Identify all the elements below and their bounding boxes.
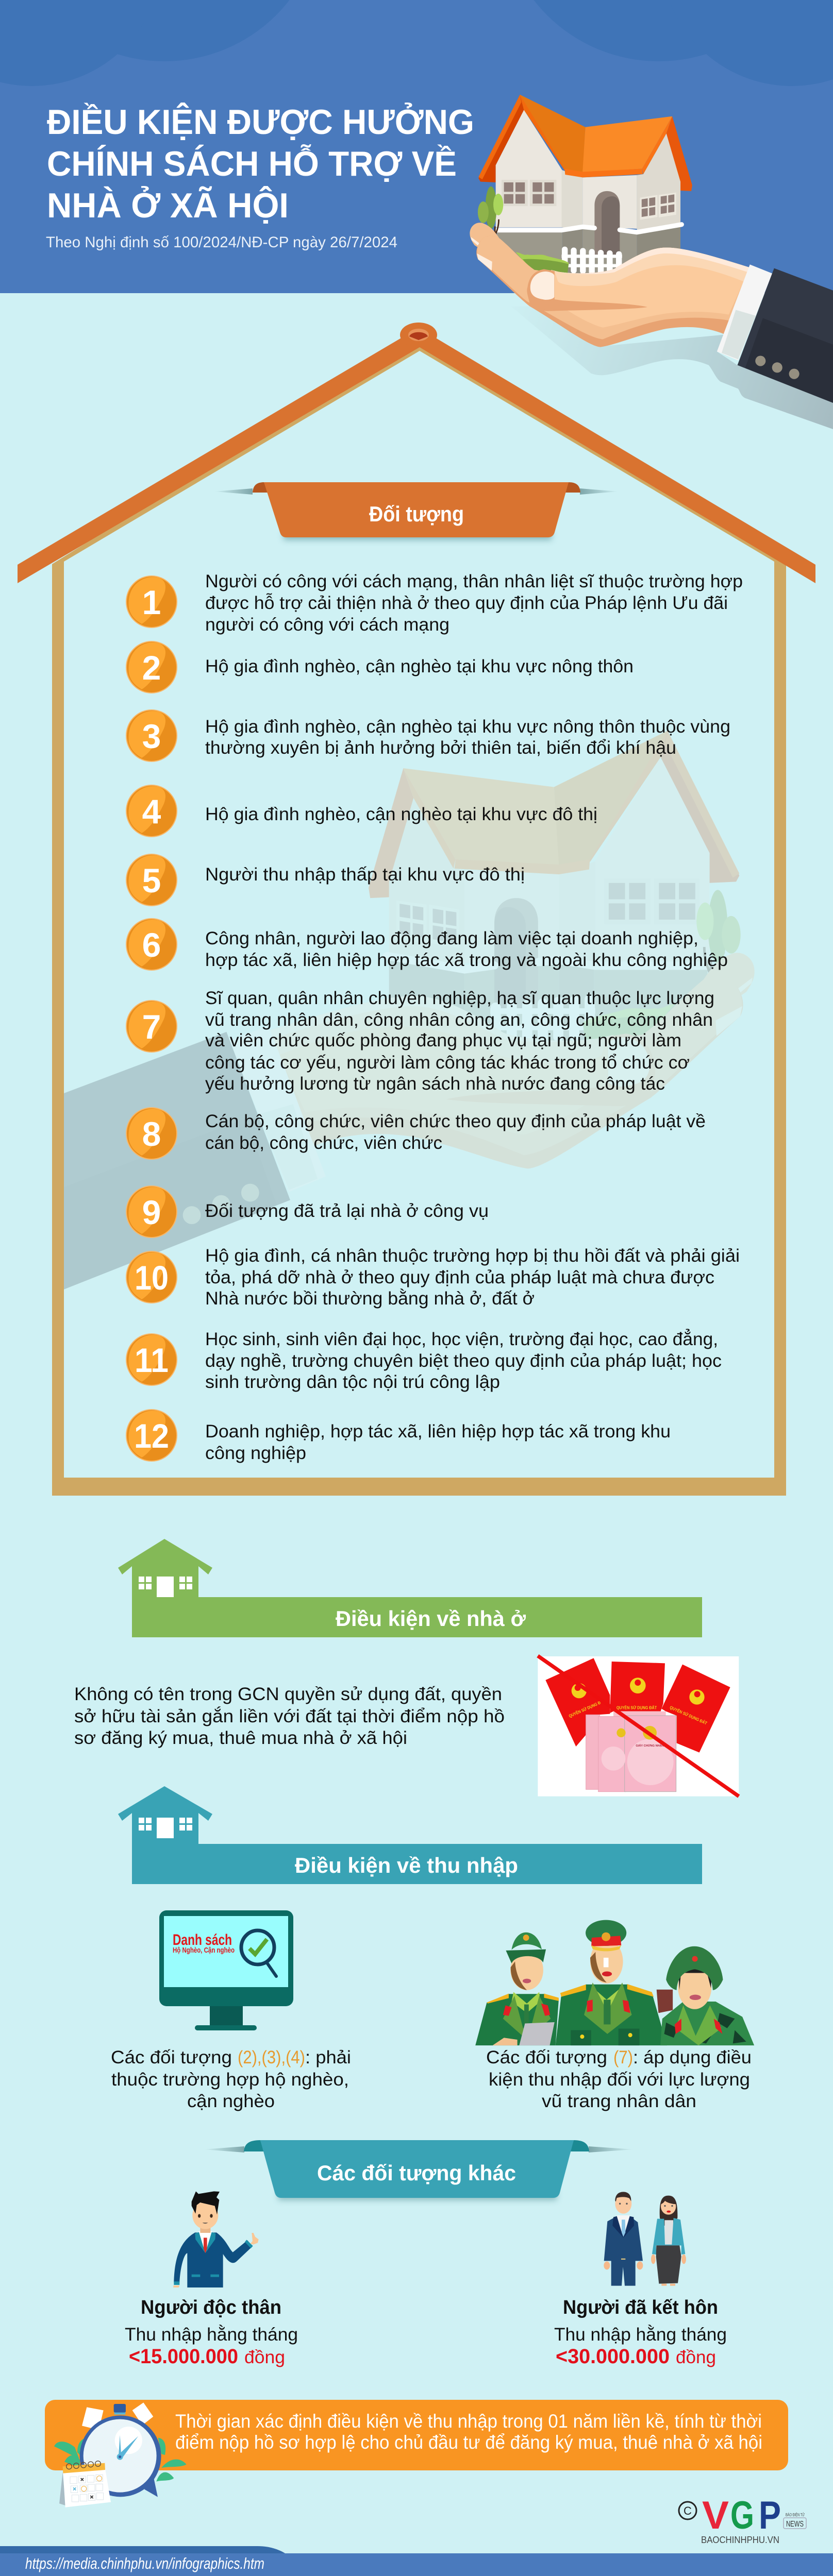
logo: VGP: C [684, 2504, 692, 2517]
item 8: Cán bộ, công chức, viên chức theo quy định của pháp luật về [205, 1111, 706, 1131]
section bar: income condition [118, 1786, 702, 1884]
income text: left: (2),(3),(4) [238, 2047, 305, 2067]
item 2: 2 [142, 649, 161, 687]
item 6: hợp tác xã, liên hiệp hợp tác xã trong và ngoài khu công nghiệp [205, 950, 728, 970]
item 2 [126, 641, 634, 693]
illustration: three soldiers [475, 1920, 754, 2045]
income text: right: : áp dụng điều [633, 2047, 752, 2067]
item 12: 12 [134, 1417, 169, 1455]
single person text: Người độc thân [141, 2297, 281, 2318]
footer bar [0, 2546, 833, 2576]
married couple text: đồng [676, 2347, 716, 2367]
title: NHÀ Ở XÃ HỘI [47, 185, 289, 225]
married couple text: Thu nhập hằng tháng [554, 2325, 727, 2345]
married couple text: <30.000.000 [556, 2345, 670, 2368]
image: crossed-out land certificates: QUYỀN SỬ DỤNG Đ [568, 1700, 602, 1719]
image: crossed-out land certificates: QUYỀN SỬ DỤNG ĐẤT [617, 1704, 657, 1710]
housing condition text: sơ đăng ký mua, thuê mua nhà ở xã hội [74, 1728, 407, 1748]
housing condition text: Không có tên trong GCN quyền sử dụng đất, quyền [74, 1684, 502, 1704]
image: crossed-out land certificates [538, 1656, 739, 1797]
title [47, 102, 474, 225]
item 3 [126, 709, 730, 762]
item 3: thường xuyên bị ảnh hưởng bởi thiên tai, biến đổi khí hậu [205, 738, 676, 758]
item 7: công tác cơ yếu, người làm công tác khác trong tổ chức cơ [205, 1053, 690, 1073]
item 10: 10 [135, 1259, 169, 1297]
ribbon heading: Các đối tượng khác: Các đối tượng khác [317, 2161, 516, 2185]
item 11: 11 [135, 1341, 169, 1379]
illustration: married couple [604, 2192, 686, 2286]
item 7: và viên chức quốc phòng đang phục vụ tại ngũ; người làm [205, 1030, 681, 1050]
section bar: housing condition [118, 1539, 702, 1637]
item 10: tỏa, phá dỡ nhà ở theo quy định của pháp luật mà chưa được [205, 1267, 714, 1287]
item 5: Người thu nhập thấp tại khu vực đô thị [205, 865, 525, 885]
housing condition text [74, 1684, 505, 1748]
item 1: được hỗ trợ cải thiện nhà ở theo quy định của Pháp lệnh Ưu đãi [205, 593, 728, 613]
income text: left: : phải [305, 2047, 351, 2067]
item 7: vũ trang nhân dân, công nhân công an, công chức, công nhân [205, 1010, 713, 1030]
item 4: Hộ gia đình nghèo, cận nghèo tại khu vực đô thị [205, 804, 597, 824]
married couple text [554, 2297, 727, 2368]
item 7: 7 [142, 1008, 161, 1046]
watermark: faded house in hand [30, 731, 755, 1303]
logo: VGP: BAOCHINHPHU.VN [701, 2535, 779, 2545]
icon: monitor with list: Hộ Nghèo, Cận nghèo [173, 1946, 235, 1955]
income text: left: cận nghèo [187, 2091, 275, 2111]
income text: left: Các đối tượng [111, 2047, 232, 2067]
income text: left: thuộc trường hợp hộ nghèo, [111, 2070, 349, 2090]
item 1: Người có công với cách mạng, thân nhân liệt sĩ thuộc trường hợp [205, 571, 743, 591]
item 8 [126, 1107, 706, 1160]
item 8: 8 [142, 1115, 161, 1153]
single person text [125, 2297, 298, 2368]
item 12: công nghiệp [205, 1443, 306, 1463]
logo: VGP: V [702, 2494, 729, 2537]
logo: VGP [679, 2494, 806, 2545]
item 3: Hộ gia đình nghèo, cận nghèo tại khu vực nông thôn thuộc vùng [205, 717, 730, 737]
header banner [0, 0, 833, 293]
item 11: sinh trường dân tộc nội trú công lập [205, 1372, 500, 1392]
item 7 [126, 988, 714, 1094]
subtitle: Theo Nghị định số 100/2024/NĐ-CP ngày 26/7/2024 [46, 234, 397, 251]
item 6 [126, 918, 728, 971]
item 11: Học sinh, sinh viên đại học, học viện, trường đại học, cao đẳng, [205, 1329, 718, 1349]
callout: time period note [45, 2400, 788, 2470]
item 6: 6 [142, 926, 161, 964]
income text: right: vũ trang nhân dân [542, 2091, 696, 2111]
icon: stopwatch and calendar [54, 2402, 187, 2507]
item 1: người có công với cách mạng [205, 615, 449, 635]
logo: VGP: P [759, 2494, 781, 2537]
hand shadow [511, 307, 833, 429]
image: crossed-out land certificates: QUYỀN SỬ DỤNG ĐẤT [669, 1704, 708, 1726]
item 7: yếu hưởng lương từ ngân sách nhà nước đang công tác [205, 1074, 665, 1094]
item 10 [126, 1246, 740, 1309]
item 1: 1 [142, 583, 161, 621]
item 6: Công nhân, người lao động đang làm việc tại doanh nghiệp, [205, 928, 698, 948]
footer bar: https://media.chinhphu.vn/infographics.htm [25, 2554, 264, 2572]
item 11: dạy nghề, trường chuyên biệt theo quy định của pháp luật; học [205, 1351, 722, 1371]
ribbon heading: Đối tượng: Đối tượng [369, 502, 464, 526]
icon: monitor with list: Danh sách [173, 1931, 232, 1948]
item 5 [126, 854, 525, 906]
image: crossed-out land certificates: GIẤY CHỨNG NHẬN [636, 1744, 664, 1748]
item 2: Hộ gia đình nghèo, cận nghèo tại khu vực nông thôn [205, 656, 634, 676]
item 9: Đối tượng đã trả lại nhà ở công vụ [205, 1201, 489, 1221]
title: CHÍNH SÁCH HỖ TRỢ VỀ [47, 144, 457, 183]
item 4 [126, 785, 597, 837]
single person text: đồng [244, 2347, 285, 2367]
ribbon heading: Đối tượng [214, 482, 619, 540]
single person text: <15.000.000 [129, 2345, 238, 2368]
ribbon heading: Các đối tượng khác [204, 2140, 634, 2200]
item 5: 5 [142, 861, 161, 900]
item 9: 9 [142, 1193, 161, 1231]
item 11 [126, 1329, 722, 1392]
income text: right: Các đối tượng [486, 2047, 607, 2067]
callout: time period note: điểm nộp hồ sơ hợp lệ cho chủ đầu tư để đăng ký mua, thuê nhà ở xã hội [175, 2432, 762, 2453]
item 1 [126, 571, 743, 635]
income text: right: kiện thu nhập đối với lực lượng [489, 2070, 750, 2090]
logo: VGP: BÁO ĐIỆN TỬ [786, 2513, 805, 2517]
income text: right [486, 2047, 752, 2111]
item 8: cán bộ, công chức, viên chức [205, 1133, 442, 1153]
item 10: Hộ gia đình, cá nhân thuộc trường hợp bị thu hồi đất và phải giải [205, 1246, 740, 1266]
section bar: income condition: Điều kiện về thu nhập [295, 1853, 518, 1877]
item 12 [126, 1409, 671, 1463]
icon: monitor with list [159, 1910, 293, 2030]
item 3: 3 [142, 717, 161, 755]
house outline wall [52, 335, 786, 1496]
item 7: Sĩ quan, quân nhân chuyên nghiệp, hạ sĩ quan thuộc lực lượng [205, 988, 714, 1008]
roof [18, 323, 815, 583]
icon: house held in hand [470, 95, 833, 425]
logo: VGP: NEWS [786, 2520, 804, 2529]
married couple text: Người đã kết hôn [563, 2297, 718, 2318]
item 10: Nhà nước bồi thường bằng nhà ở, đất ở [205, 1289, 535, 1309]
callout: time period note: Thời gian xác định điều kiện về thu nhập trong 01 năm liền kề, tính từ thời [175, 2411, 762, 2432]
housing condition text: sở hữu tài sản gắn liền với đất tại thời điểm nộp hồ [74, 1706, 505, 1726]
title: ĐIỀU KIỆN ĐƯỢC HƯỞNG [47, 102, 474, 142]
single person text: Thu nhập hằng tháng [125, 2325, 298, 2345]
item 12: Doanh nghiệp, hợp tác xã, liên hiệp hợp tác xã trong khu [205, 1421, 671, 1442]
income text: right: (7) [613, 2047, 633, 2067]
logo: VGP: G [730, 2494, 754, 2537]
item 9 [126, 1185, 489, 1238]
income text: left [111, 2047, 351, 2111]
item 4: 4 [142, 792, 161, 831]
section bar: housing condition: Điều kiện về nhà ở [336, 1606, 526, 1631]
illustration: single man [173, 2191, 259, 2287]
